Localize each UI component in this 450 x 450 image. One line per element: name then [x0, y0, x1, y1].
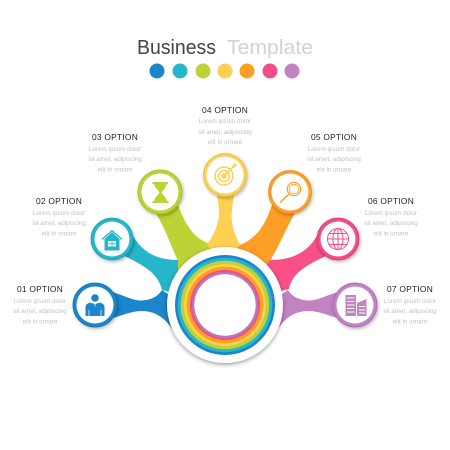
arm: 03 green — [152, 205, 225, 290]
central rainbow circle — [167, 247, 283, 363]
text: 03 option: Lorem ipsum dolor — [89, 146, 141, 153]
title — [137, 37, 313, 59]
text: 03 option: elit in ornare — [98, 166, 133, 174]
text: 06 option: elit in ornare — [374, 230, 409, 238]
text: 04 option: sit amet, adipiscing — [198, 129, 252, 136]
text: 03 option: 03 OPTION — [92, 132, 138, 142]
node 06 — [317, 218, 359, 260]
icon: person — [86, 294, 104, 316]
text: 04 option: elit in ornare — [208, 139, 243, 146]
text: 04 option: Lorem ipsum dolor — [199, 118, 251, 125]
text: 04 option — [198, 105, 252, 146]
text: 07 option: sit amet, adipiscing — [383, 308, 437, 315]
node 04 — [204, 154, 246, 196]
icon: buildings — [346, 295, 366, 316]
text: 05 option: elit in ornare — [317, 166, 352, 174]
arm: 02 teal — [120, 225, 205, 300]
text: 07 option: 07 OPTION — [387, 284, 433, 294]
text: 02 option — [32, 196, 86, 238]
text: 04 option: 04 OPTION — [202, 105, 248, 115]
text: 07 option — [383, 284, 437, 326]
text: 06 option: 06 OPTION — [368, 196, 414, 206]
text: 01 option: 01 OPTION — [17, 284, 63, 294]
text: 01 option — [13, 284, 67, 326]
node 03 — [138, 170, 182, 214]
arm: 01 blue — [105, 290, 205, 332]
colour dots — [150, 64, 300, 78]
title: Template — [227, 37, 313, 59]
text: 05 option: Lorem ipsum dolor — [308, 146, 360, 153]
node 02 — [91, 218, 133, 260]
arm: 04 yellow — [207, 190, 241, 275]
icon: magnifier — [280, 182, 301, 202]
text: 01 option: sit amet, adipiscing — [13, 308, 67, 315]
text: 06 option: sit amet, adipiscing — [364, 220, 418, 227]
text: 02 option: 02 OPTION — [36, 196, 82, 206]
text: 06 option: Lorem ipsum dolor — [365, 210, 417, 217]
text: 03 option — [88, 132, 142, 174]
icon: house — [102, 230, 122, 250]
text: 02 option: elit in ornare — [42, 230, 77, 238]
node 07 — [333, 283, 377, 327]
icon: globe — [328, 228, 348, 250]
text: 02 option: Lorem ipsum dolor — [33, 210, 85, 217]
text: 05 option: sit amet, adipiscing — [307, 156, 361, 163]
text: 05 option — [307, 132, 361, 174]
icon: target — [215, 164, 236, 185]
text: 07 option: Lorem ipsum dolor — [384, 298, 436, 305]
arm: 07 purple — [245, 290, 345, 332]
text: 02 option: sit amet, adipiscing — [32, 220, 86, 227]
text: 03 option: sit amet, adipiscing — [88, 156, 142, 163]
text: 01 option: Lorem ipsum dolor — [14, 298, 66, 305]
text: 01 option: elit in ornare — [23, 318, 58, 326]
node 01 — [73, 283, 117, 327]
arm: 05 orange — [225, 205, 298, 290]
node 05 — [268, 170, 312, 214]
text: 05 option: 05 OPTION — [311, 132, 357, 142]
icon: hourglass — [152, 182, 168, 203]
text: 07 option: elit in ornare — [393, 318, 428, 326]
arm: 06 pink — [245, 225, 330, 300]
title: Business — [137, 37, 216, 59]
text: 06 option — [364, 196, 418, 238]
